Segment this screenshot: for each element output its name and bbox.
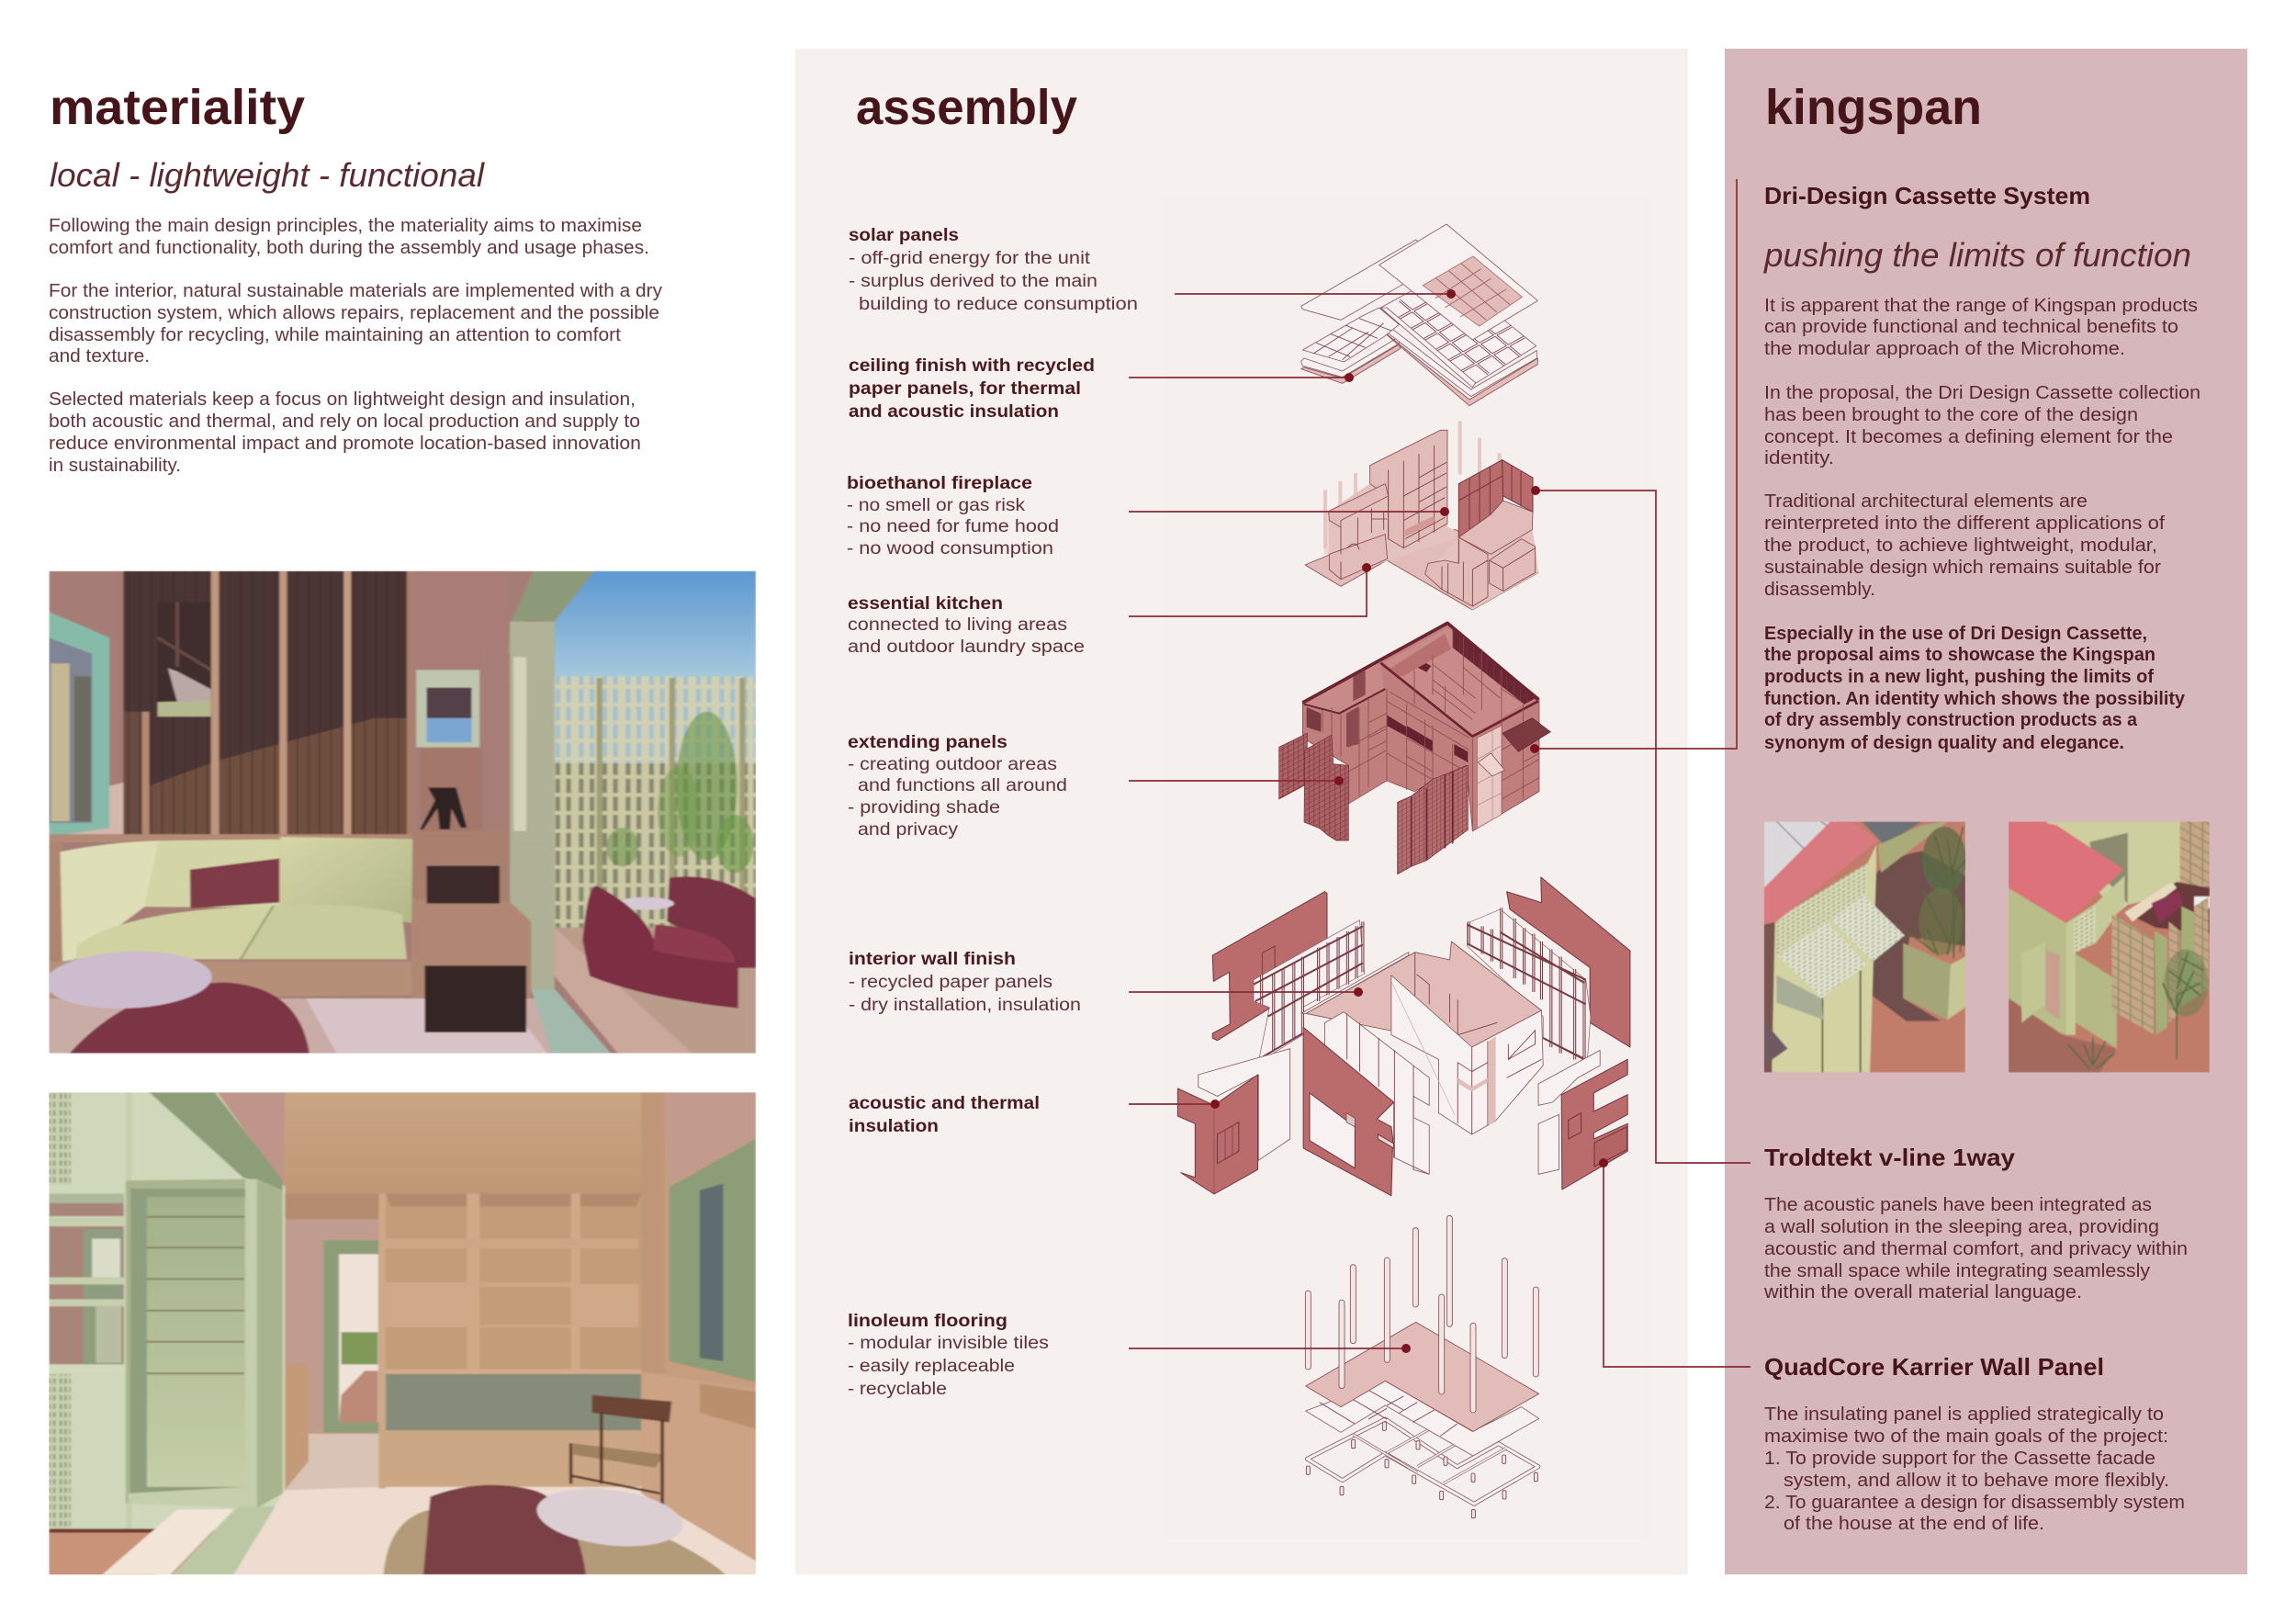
text block: materiality description: both acoustic and thermal, and rely on local production and supply to	[49, 411, 640, 432]
frame feet	[1306, 1422, 1537, 1518]
text block: materiality description: comfort and functionality, both during the assembly and usage phases.	[49, 237, 649, 258]
labels: essential kitchen: and outdoor laundry space	[848, 637, 1085, 657]
labels: ceiling finish: ceiling finish with recycled	[849, 356, 1095, 376]
image: facade detail with folding screens	[2009, 821, 2210, 1073]
labels: essential kitchen: connected to living areas	[848, 615, 1067, 635]
text block: Kingspan description: reinterpreted into the different applications of	[1764, 513, 2165, 534]
text block: materiality description: in sustainability.	[49, 455, 181, 476]
labels: solar panels: - off-grid energy for the unit	[849, 249, 1091, 268]
modular tile layer	[1306, 1381, 1539, 1456]
roof plate with solar panels	[1379, 224, 1537, 340]
exploded axonometric: wall build-up	[1177, 877, 1630, 1196]
interior wall finish panel back left	[1212, 892, 1327, 1041]
text block: Troldtekt description: within the overall material language.	[1763, 1282, 2082, 1303]
ceiling frame grid	[1302, 273, 1536, 388]
labels: bioethanol fireplace: - no smell or gas risk	[847, 496, 1026, 515]
text block: materiality description: and texture.	[49, 345, 150, 367]
labels: interior wall finish	[849, 950, 1081, 1015]
interior wall finish panel back right	[1507, 877, 1630, 1047]
labels: bioethanol fireplace: bioethanol fireplace	[847, 474, 1032, 493]
labels: bioethanol fireplace	[847, 474, 1059, 558]
leader line: essential kitchen	[1129, 563, 1371, 616]
text block: QuadCore description: 1. To provide support for the Cassette facade	[1764, 1449, 2155, 1469]
leader line: solar panels	[1175, 289, 1456, 299]
text block: Kingspan description: sustainable design which remains suitable for	[1764, 558, 2161, 578]
pink inner ceiling shell	[1301, 942, 1541, 1047]
labels: ceiling finish	[849, 356, 1095, 422]
leader line: Dri-Design Cassette System	[1530, 179, 1737, 753]
stud frame left	[1254, 920, 1365, 1063]
text block: Troldtekt description: a wall solution in the sleeping area, providing	[1764, 1217, 2159, 1237]
labels: solar panels: solar panels	[849, 226, 959, 245]
text block: Kingspan bold statement: the proposal aims to showcase the Kingspan	[1764, 645, 2155, 665]
panel: kingspan	[1725, 49, 2247, 1574]
labels: linoleum flooring: - modular invisible tiles	[848, 1334, 1049, 1353]
lattice panels left	[1279, 733, 1348, 840]
dark awning flap	[1503, 718, 1550, 751]
labels: acoustic and thermal insulation: insulation	[849, 1117, 939, 1136]
panel: materiality	[49, 80, 663, 476]
raised floor frame	[1307, 1419, 1538, 1504]
heading: kingspan: kingspan	[1765, 80, 1982, 135]
text block: Kingspan bold statement	[1764, 624, 2186, 753]
labels: bioethanol fireplace: - no need for fume hood	[847, 517, 1059, 536]
leader line: ceiling finish	[1129, 373, 1354, 382]
text block: Troldtekt description: The acoustic panels have been integrated as	[1764, 1195, 2152, 1215]
text block: Kingspan description: In the proposal, the Dri Design Cassette collection	[1764, 383, 2200, 403]
labels: ceiling finish: paper panels, for thermal	[849, 379, 1081, 399]
text block: materiality description: Selected materials keep a focus on lightweight design and insulation,	[49, 389, 636, 410]
text block: Kingspan description: the modular approach of the Microhome.	[1764, 339, 2125, 359]
wardrobe wall	[1370, 430, 1447, 548]
labels: extending panels: extending panels	[848, 733, 1007, 752]
exploded axonometric: extending panels and facade	[1279, 623, 1550, 874]
sleeping platform and storage	[1425, 501, 1536, 606]
white boards behind right panel	[1538, 1050, 1600, 1174]
text block: Kingspan description: the product, to achieve lightweight, modular,	[1764, 536, 2157, 556]
labels: essential kitchen: essential kitchen	[848, 594, 1003, 614]
labels: linoleum flooring: - recyclable	[848, 1380, 947, 1399]
subtitle: local lightweight functional: local - lightweight - functional	[50, 156, 485, 194]
labels: essential kitchen	[848, 594, 1085, 657]
labels: linoleum flooring: - easily replaceable	[848, 1357, 1015, 1376]
labels: extending panels: - providing shade	[848, 798, 1000, 818]
image: facade detail with open louvre panels	[1764, 821, 1966, 1073]
leader line: extending panels	[1129, 776, 1344, 785]
panel: assembly drawing backdrop	[1164, 197, 1651, 1539]
white inner volume	[1391, 976, 1543, 1134]
acoustic wall panels	[1458, 460, 1533, 537]
image: kitchen and shelving interior render	[49, 1092, 756, 1575]
labels: interior wall finish: - dry installation, insulation	[849, 996, 1081, 1015]
leader line: acoustic and thermal insulation	[1129, 1100, 1220, 1109]
text block: Kingspan description: It is apparent that the range of Kingspan products	[1764, 296, 2198, 316]
text block: QuadCore description: 2. To guarantee a design for disassembly system	[1764, 1493, 2185, 1513]
light entrance strip	[1477, 726, 1504, 829]
labels: extending panels: and functions all around	[858, 776, 1067, 795]
subheading: QuadCore Karrier Wall Panel: QuadCore Karrier Wall Panel	[1764, 1353, 2104, 1381]
leader line: linoleum flooring	[1129, 1344, 1411, 1353]
leader line: QuadCore Karrier Wall Panel	[1599, 1158, 1750, 1367]
text block: QuadCore description	[1764, 1404, 2185, 1534]
door outline on back left panel	[1262, 946, 1275, 990]
text block: QuadCore description: system, and allow it to behave more flexibly.	[1784, 1471, 2169, 1491]
text block: Kingspan description: Traditional architectural elements are	[1764, 491, 2088, 512]
facade body	[1302, 623, 1539, 831]
text block: materiality description	[49, 215, 663, 476]
kitchen counter and upper units	[1329, 484, 1389, 580]
service posts	[1305, 1215, 1538, 1413]
text block: Kingspan bold statement: function. An identity which shows the possibility	[1764, 689, 2186, 709]
text block: Kingspan description	[1764, 296, 2200, 600]
exploded axonometric: floor system	[1305, 1215, 1539, 1518]
subheading: Troldtekt v-line 1way: Troldtekt v-line 1way	[1764, 1144, 2016, 1171]
stud frame right	[1468, 908, 1591, 1063]
labels: interior wall finish: interior wall finish	[849, 950, 1016, 969]
text block: Kingspan description: identity.	[1764, 448, 1834, 468]
wall panel left with acoustic insulation	[1177, 1075, 1258, 1194]
text block: QuadCore description: The insulating panel is applied strategically to	[1764, 1404, 2164, 1425]
subheading: Dri-Design Cassette System: Dri-Design Cassette System	[1764, 182, 2090, 209]
text block: Kingspan description: concept. It becomes a defining element for the	[1764, 427, 2173, 447]
leader line: Troldtekt v-line	[1531, 486, 1750, 1163]
text block: materiality description: construction system, which allows repairs, replacement and the possible	[49, 302, 659, 323]
text block: Kingspan description: disassembly.	[1764, 580, 1875, 600]
lattice panels front	[1398, 765, 1468, 874]
wall panel right with recess	[1561, 1059, 1627, 1190]
labels: interior wall finish: - recycled paper panels	[849, 973, 1052, 992]
exploded axonometric: roof and solar panels	[1301, 224, 1537, 406]
leader line: interior wall finish	[1129, 987, 1363, 997]
text block: Kingspan bold statement: products in a new light, pushing the limits of	[1764, 667, 2154, 687]
text block: Kingspan bold statement: of dry assembly construction products as a	[1764, 710, 2138, 730]
text block: QuadCore description: of the house at the end of life.	[1784, 1514, 2044, 1534]
text block: materiality description: reduce environmental impact and promote location-based innovation	[49, 433, 641, 454]
labels: extending panels: - creating outdoor areas	[848, 755, 1057, 774]
heading: assembly: assembly	[856, 80, 1077, 135]
labels: solar panels: - surplus derived to the main	[849, 272, 1097, 291]
text block: materiality description: disassembly for recycling, while maintaining an attention to comfort	[49, 324, 621, 345]
linoleum floor	[1306, 1322, 1539, 1431]
white board strips centre	[1325, 1012, 1429, 1174]
labels: ceiling finish: and acoustic insulation	[849, 402, 1059, 422]
panel: assembly	[795, 49, 1688, 1574]
exploded axonometric: interior fit-out	[1305, 421, 1538, 610]
image: living room interior render	[42, 571, 756, 1054]
labels: extending panels: and privacy	[858, 820, 959, 840]
subtitle: pushing the limits of function: pushing the limits of function	[1763, 236, 2191, 274]
text block: Troldtekt description: the small space while integrating seamlessly	[1764, 1261, 2150, 1281]
text block: materiality description: For the interior, natural sustainable materials are implemented with a dry	[49, 280, 663, 301]
labels: linoleum flooring	[848, 1312, 1049, 1399]
text block: Kingspan bold statement: synonym of design quality and elegance.	[1764, 733, 2124, 753]
floating columns	[1323, 421, 1502, 548]
text block: Troldtekt description	[1763, 1195, 2188, 1303]
text block: Kingspan description: can provide functional and technical benefits to	[1764, 317, 2178, 337]
wall panel with large opening	[1303, 1027, 1394, 1196]
floor plate	[1305, 530, 1538, 610]
labels: linoleum flooring: linoleum flooring	[848, 1312, 1007, 1331]
roof plate left	[1301, 240, 1426, 320]
labels: acoustic and thermal insulation	[849, 1094, 1040, 1136]
labels: extending panels	[848, 733, 1067, 840]
labels: bioethanol fireplace: - no wood consumption	[847, 539, 1053, 558]
text block: Troldtekt description: acoustic and thermal comfort, and privacy within	[1764, 1239, 2188, 1259]
labels: solar panels: building to reduce consumption	[859, 295, 1138, 314]
text block: Kingspan description: has been brought to the core of the design	[1764, 405, 2138, 425]
heading: materiality: materiality	[50, 80, 305, 135]
leader line: bioethanol fireplace	[1129, 507, 1449, 516]
text block: materiality description: Following the main design principles, the materiality aims to maximise	[49, 215, 642, 236]
text block: Kingspan bold statement: Especially in the use of Dri Design Cassette,	[1764, 624, 2147, 644]
ceiling layers	[1301, 320, 1537, 406]
solid interior silhouette	[1324, 430, 1538, 610]
labels: acoustic and thermal insulation: acoustic and thermal	[849, 1094, 1040, 1113]
text block: QuadCore description: maximise two of the main goals of the project:	[1764, 1427, 2168, 1447]
labels: solar panels	[849, 226, 1138, 314]
white boards behind left panel	[1199, 1049, 1290, 1160]
